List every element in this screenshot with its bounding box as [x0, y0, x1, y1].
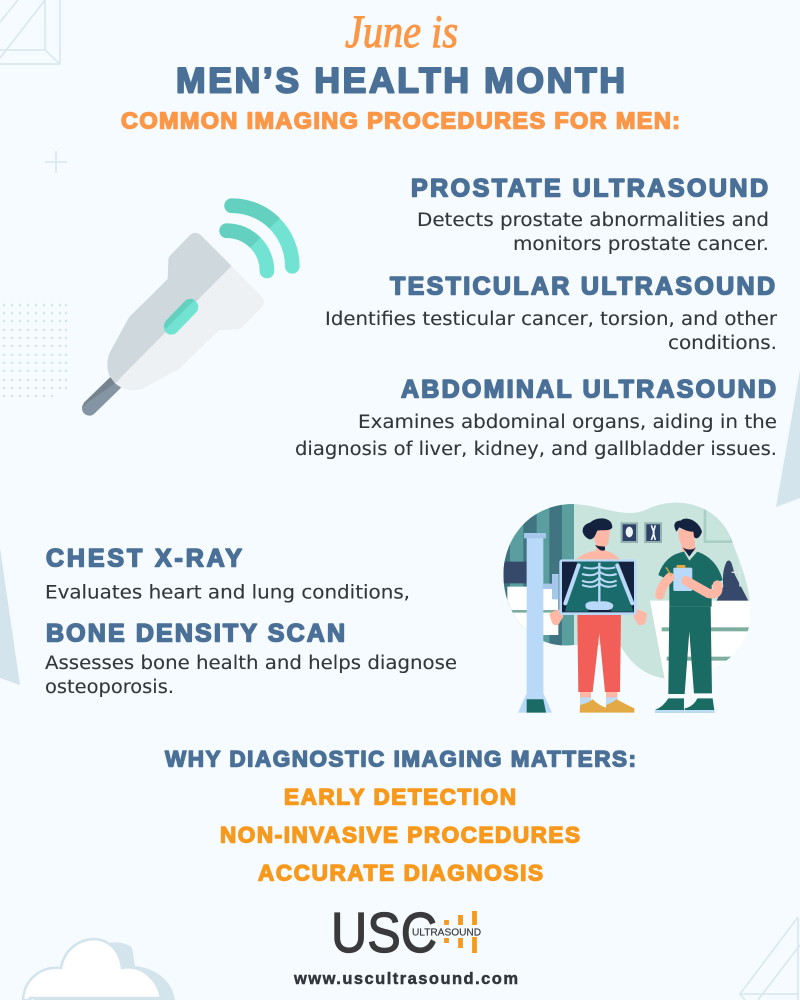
- benefit: non-invasive procedures: NON-INVASIVE PROCEDURES: [220, 822, 580, 848]
- probe body: [107, 233, 264, 390]
- logo: USC Ultrasound: ULTRASOUND: [412, 926, 481, 938]
- website url: www.uscultrasound.com: [293, 970, 518, 988]
- text: abdominal description: [295, 412, 777, 460]
- text: testicular description: conditions.: [668, 333, 777, 354]
- heading: testicular ultrasound: TESTICULAR ULTRASOUND: [390, 272, 775, 300]
- text: bone density description: osteoporosis.: [45, 677, 174, 698]
- x-ray machine stand: [518, 533, 559, 713]
- patient: [549, 518, 647, 713]
- icon: ultrasound probe: [82, 198, 292, 408]
- text: testicular description: [325, 309, 777, 354]
- icon: cloud: [23, 939, 175, 1000]
- subtitle: COMMON IMAGING PROCEDURES FOR MEN:: [121, 108, 680, 134]
- text: prostate description: monitors prostate cancer.: [513, 234, 769, 255]
- title: June is: June is: [345, 6, 458, 58]
- background blob: [503, 502, 750, 679]
- probe cable: [82, 377, 115, 408]
- heading: abdominal ultrasound: ABDOMINAL ULTRASOUND: [401, 376, 776, 404]
- technician: [655, 519, 723, 713]
- wall pictures: [621, 522, 662, 543]
- ultrasound waves: [219, 198, 292, 271]
- text: abdominal description: Examines abdominal organs, aiding in the: [358, 412, 777, 433]
- text: prostate description: [417, 210, 769, 255]
- text: bone density description: [45, 653, 457, 698]
- text: prostate description: Detects prostate abnormalities and: [417, 210, 769, 231]
- x-ray panel: [559, 559, 637, 615]
- heading: bone density scan: BONE DENSITY SCAN: [46, 620, 345, 648]
- logo: USC Ultrasound: USC: [331, 901, 437, 965]
- text: abdominal description: diagnosis of liver, kidney, and gallbladder issues.: [295, 439, 777, 460]
- decorative dot grid: [3, 304, 67, 397]
- benefit: early detection: EARLY DETECTION: [284, 784, 516, 810]
- benefit: accurate diagnosis: ACCURATE DIAGNOSIS: [258, 860, 543, 886]
- title: Men's Health Month: MEN’S HEALTH MONTH: [176, 60, 625, 100]
- illustration: x-ray exam: [503, 502, 750, 713]
- heading: prostate ultrasound: PROSTATE ULTRASOUND: [411, 174, 768, 202]
- text: bone density description: Assesses bone health and helps diagnose: [45, 653, 457, 674]
- text: testicular description: Identifies testicular cancer, torsion, and other: [325, 309, 777, 330]
- text: chest description: Evaluates heart and lung conditions,: [45, 582, 410, 604]
- heading: why diagnostic imaging matters: WHY DIAGNOSTIC IMAGING MATTERS:: [165, 746, 636, 772]
- heading: chest x-ray: CHEST X-RAY: [46, 544, 242, 572]
- probe button: [164, 299, 195, 329]
